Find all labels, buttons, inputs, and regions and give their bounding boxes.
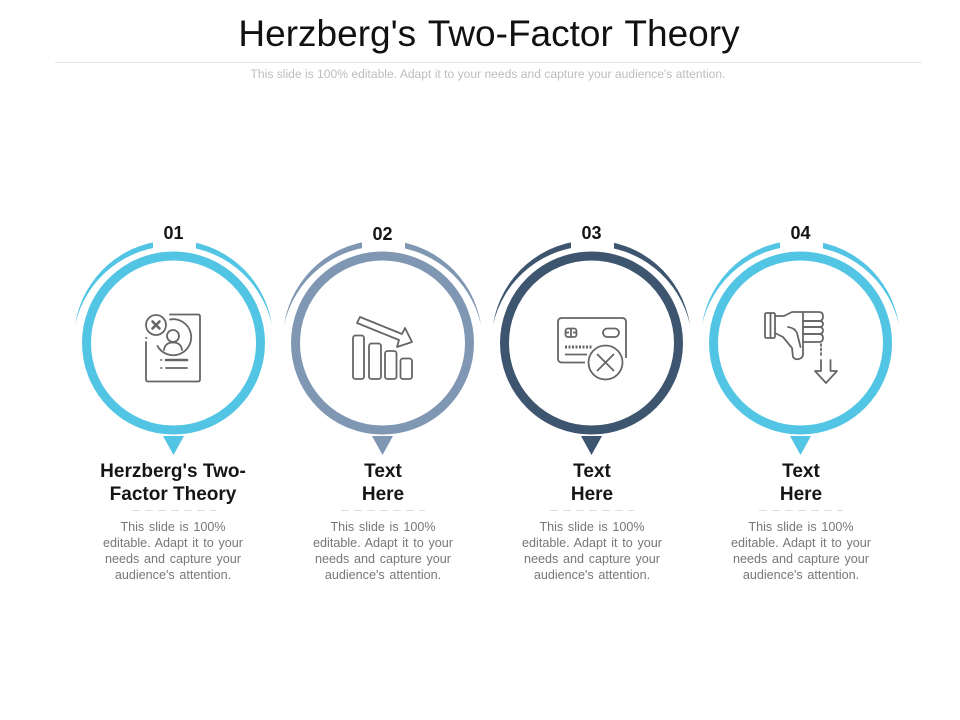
step 3 heading	[571, 461, 613, 505]
step 2 ring	[284, 232, 481, 455]
icon: thumbs down with arrow	[765, 312, 837, 383]
step 2 text: editable. Adapt it to your	[313, 536, 453, 550]
step 4 heading: Text	[782, 461, 820, 482]
icon: declined credit card	[558, 318, 626, 380]
step 4 text: This slide is 100%	[748, 520, 854, 534]
step 3 text: needs and capture your	[524, 552, 660, 566]
step 1 text: needs and capture your	[105, 552, 241, 566]
step 3 ring	[493, 232, 690, 455]
step 4 heading: Here	[780, 484, 822, 505]
step 3 text: This slide is 100%	[539, 520, 645, 534]
step 4 text: needs and capture your	[733, 552, 869, 566]
step 1 text: This slide is 100%	[120, 520, 226, 534]
step 2 heading	[362, 461, 404, 505]
step 1 heading: Factor Theory	[110, 484, 236, 505]
step 4 text: audience's attention.	[743, 568, 859, 582]
step 4 text	[731, 520, 871, 582]
step 1 heading	[100, 461, 246, 505]
heading dividers	[132, 510, 843, 512]
step 2 number: 02	[372, 224, 393, 244]
subtitle: This slide is 100% editable. Adapt it to your needs and capture your audience's attention.	[251, 67, 725, 81]
icon: declining bar chart	[353, 317, 412, 379]
step 2 heading: Text	[364, 461, 402, 482]
step 3 text: editable. Adapt it to your	[522, 536, 662, 550]
step 2 text	[313, 520, 453, 582]
step 4 graphic	[702, 223, 899, 455]
step 3 text	[522, 520, 662, 582]
step 4 ring	[702, 232, 899, 455]
step 2 text: This slide is 100%	[330, 520, 436, 534]
step 2 text: needs and capture your	[315, 552, 451, 566]
step 4 text: editable. Adapt it to your	[731, 536, 871, 550]
step 4 heading	[780, 461, 822, 505]
icon: rejected profile document	[146, 314, 200, 382]
step 1 graphic	[75, 223, 272, 455]
step 1 number: 01	[163, 223, 184, 243]
step 1 heading: Herzberg's Two-	[100, 461, 246, 482]
step 3 number: 03	[581, 223, 602, 243]
step 1 ring	[75, 232, 272, 455]
step 2 text: audience's attention.	[325, 568, 441, 582]
step 2 graphic	[284, 224, 481, 455]
step 1 text	[103, 520, 243, 582]
step 4 number: 04	[790, 223, 811, 243]
step 2 heading: Here	[362, 484, 404, 505]
step 3 graphic	[493, 223, 690, 455]
step 3 heading: Text	[573, 461, 611, 482]
step 1 text: audience's attention.	[115, 568, 231, 582]
step 3 heading: Here	[571, 484, 613, 505]
step 3 text: audience's attention.	[534, 568, 650, 582]
title: Herzberg's Two-Factor Theory	[238, 13, 740, 54]
step 1 text: editable. Adapt it to your	[103, 536, 243, 550]
